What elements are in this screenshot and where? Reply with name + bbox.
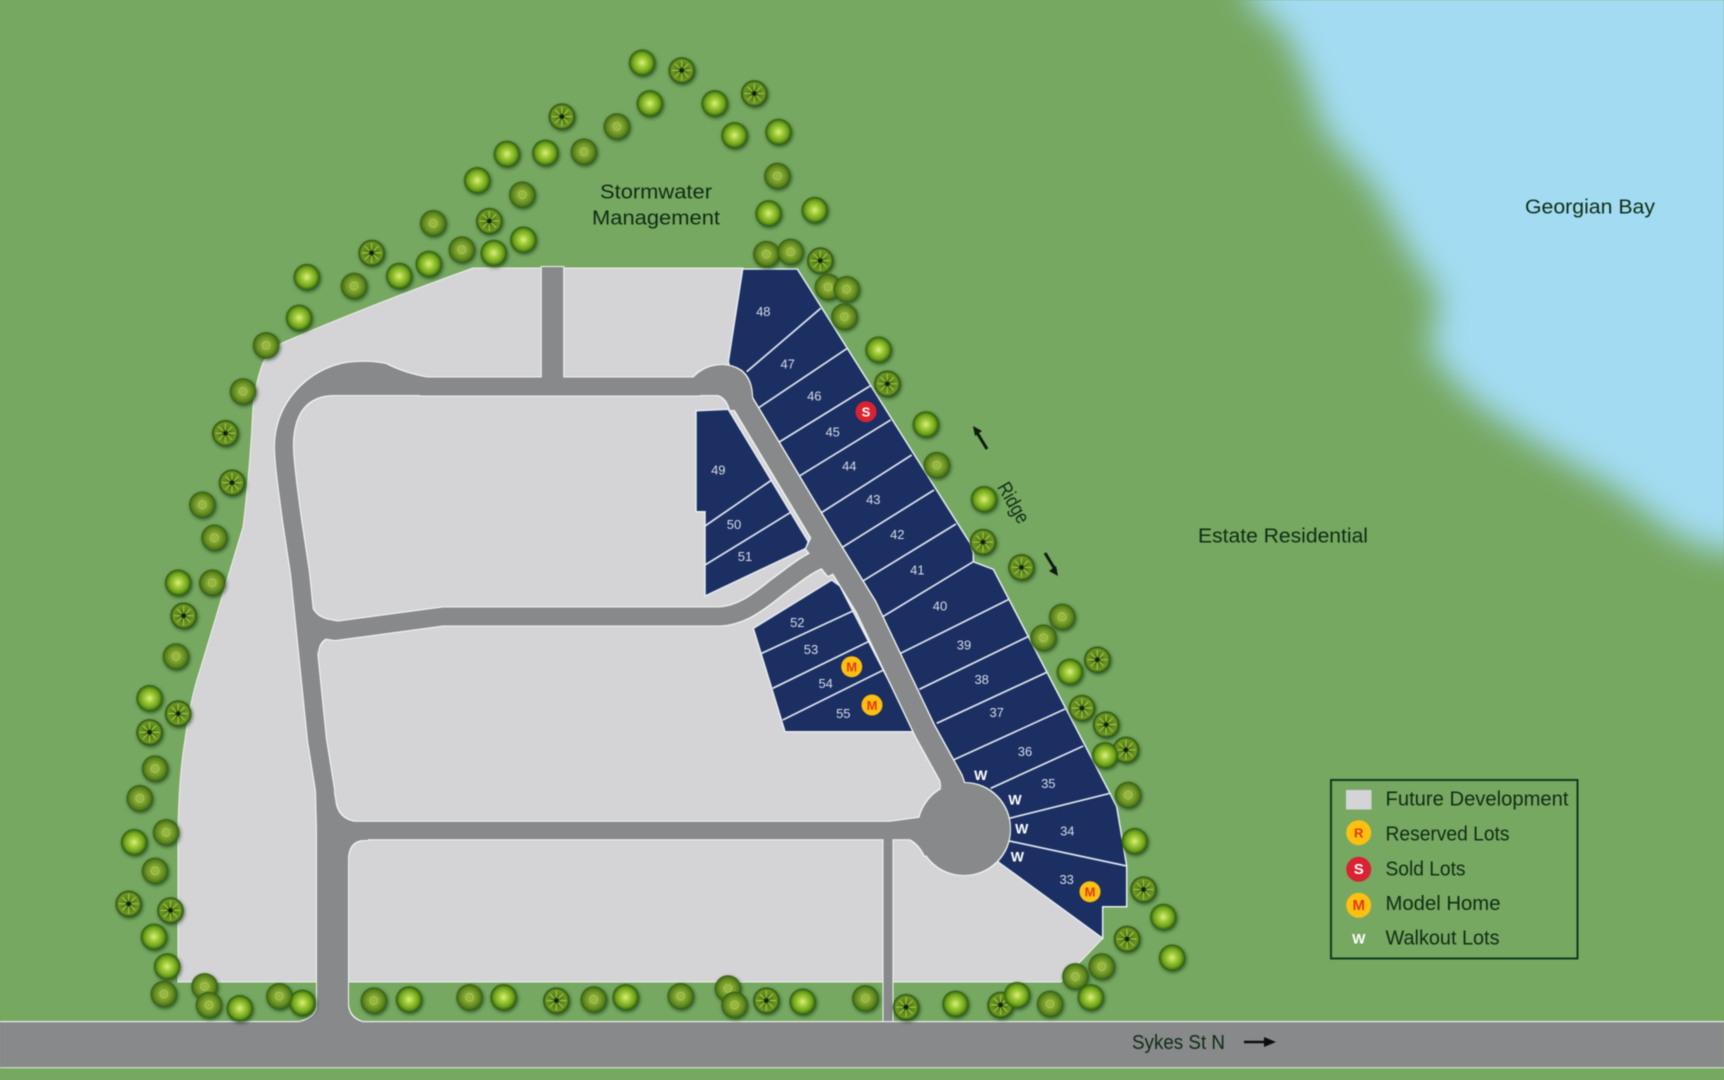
legend box [1331, 780, 1578, 958]
model home marker lot 54: M [846, 660, 857, 674]
lot numbers: 33 [1059, 872, 1074, 887]
model home marker lot 33 [1080, 881, 1100, 902]
lot numbers: 54 [818, 676, 833, 691]
walkout lot markers: W [974, 767, 988, 783]
lot numbers: 41 [910, 562, 925, 578]
legend item: future development: Future Development [1386, 789, 1569, 811]
label: Estate Residential: Estate Residential [1198, 526, 1368, 548]
lot numbers: 55 [836, 706, 851, 721]
lot numbers: 39 [957, 638, 971, 652]
lot numbers: 52 [790, 615, 805, 630]
road top edge [0, 1021, 300, 1022]
legend item: walkout lots: Walkout Lots [1386, 928, 1500, 950]
water: Georgian Bay [1248, 0, 1724, 560]
legend item: sold lots: S [1354, 861, 1364, 878]
lot numbers: 38 [974, 672, 989, 687]
legend item: walkout lots: W [1352, 930, 1366, 946]
lot dividers 33-48 [747, 308, 1127, 866]
road bottom edge [0, 1067, 1724, 1068]
lot numbers: 49 [711, 462, 726, 478]
lot numbers: 53 [804, 642, 818, 657]
legend item: sold lots [1346, 857, 1466, 882]
legend item: sold lots: Sold Lots [1386, 858, 1466, 880]
walkout lot markers [974, 767, 1029, 865]
label: Stormwater Management: Management [592, 208, 720, 230]
lots 49-51 parcel [696, 409, 808, 596]
lot dividers 52-55 [762, 610, 885, 720]
legend item: model home: Model Home [1386, 893, 1500, 915]
walkout lot markers: W [1008, 791, 1022, 807]
lot numbers: 46 [807, 388, 822, 404]
legend item: reserved lots: Reserved Lots [1386, 824, 1510, 846]
lot numbers: 44 [842, 458, 857, 474]
lot numbers: 40 [933, 598, 947, 614]
road top edge east [362, 1021, 1724, 1022]
walkout lot markers: W [1015, 820, 1029, 836]
lot numbers: 35 [1041, 776, 1056, 791]
model home marker lot 33: M [1085, 884, 1095, 900]
lot numbers: 47 [780, 356, 795, 372]
lots block 52 to 55 [753, 580, 915, 732]
legend item: model home: M [1352, 897, 1365, 914]
label: Stormwater Management: Stormwater [600, 182, 712, 204]
road surface [0, 1022, 1724, 1067]
internal road network [275, 267, 1010, 1022]
lot numbers: 42 [890, 527, 905, 542]
lot numbers [711, 304, 1075, 887]
lot numbers: 51 [738, 549, 752, 564]
road: Sykes St N [0, 1021, 1724, 1068]
lot numbers: 45 [825, 424, 840, 440]
lot numbers: 36 [1018, 744, 1032, 759]
legend [1331, 780, 1578, 958]
legend item: reserved lots [1346, 820, 1510, 846]
walkout lot markers: W [1011, 849, 1025, 865]
trees surrounding the site [115, 49, 1185, 1021]
lot numbers: 34 [1060, 824, 1075, 838]
lots 33-48 parcel [728, 269, 1127, 938]
legend item: reserved lots: R [1354, 826, 1364, 840]
model home marker lot 55 [862, 694, 882, 716]
arrow: Ridge south [1045, 553, 1058, 576]
lots block 33 to 48 [728, 269, 1127, 938]
future development land [178, 268, 1103, 982]
lot numbers: 43 [866, 492, 881, 507]
label: Sykes St N: Sykes St N [1132, 1032, 1225, 1054]
lots block 49 to 51 [696, 409, 808, 596]
model home marker lot 54 [841, 656, 862, 677]
lot numbers: 50 [727, 517, 741, 532]
lot dividers 49-51 [705, 480, 792, 565]
lots 52-55 parcel [753, 580, 915, 732]
label: Georgian Bay: Georgian Bay [1525, 196, 1655, 218]
arrow: Ridge north [973, 426, 987, 449]
arrow: Sykes St N [1244, 1037, 1276, 1047]
model home marker lot 55: M [867, 698, 877, 713]
legend item: model home [1346, 893, 1500, 918]
lot numbers: 48 [756, 304, 771, 319]
sold lot marker: S [862, 404, 871, 420]
sold lot marker [856, 401, 876, 422]
lot numbers: 37 [989, 705, 1004, 720]
label: Ridge: Ridge [992, 478, 1034, 528]
label: Stormwater Management [592, 182, 720, 230]
